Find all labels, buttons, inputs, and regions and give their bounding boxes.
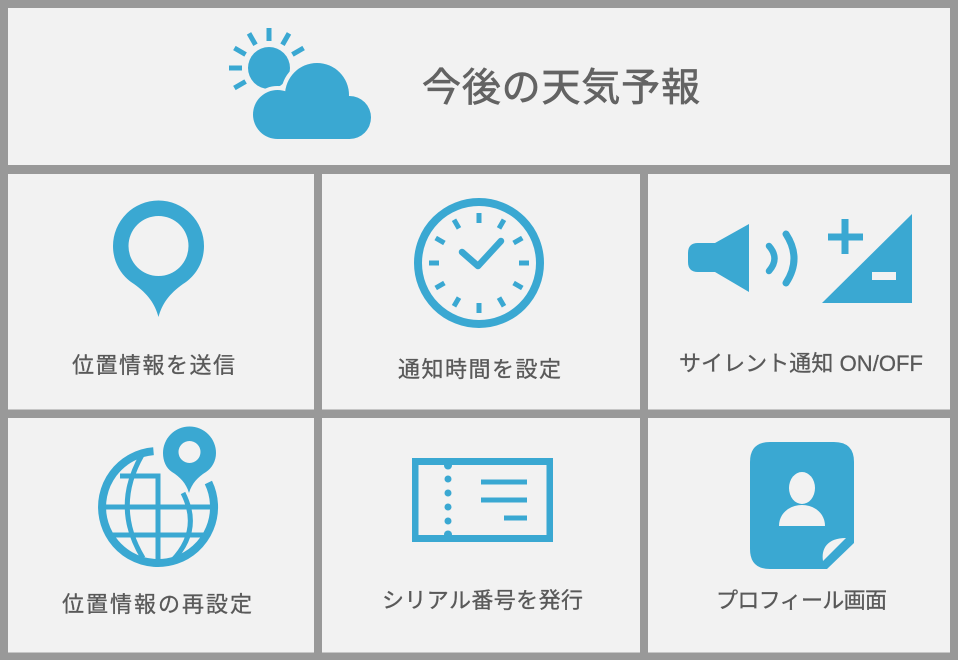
- label: 通知時間を設定: [398, 357, 561, 382]
- icon: sun and cloud: [229, 28, 371, 139]
- icon: volume up and down: [822, 214, 912, 303]
- panel: send location: [8, 174, 314, 410]
- label: サイレント通知 ON/OFF: [679, 351, 923, 376]
- icon: ticket: [412, 458, 553, 542]
- icon: location pin: [113, 200, 204, 317]
- label: プロフィール画面: [716, 588, 887, 613]
- panel: reset location: [8, 418, 314, 652]
- icon: clock: [418, 202, 540, 324]
- label: 位置情報の再設定: [62, 592, 252, 617]
- label: 位置情報を送信: [72, 353, 235, 378]
- panel: notification time: [322, 174, 640, 410]
- panel: weather forecast header: [8, 8, 950, 165]
- title: 今後の天気予報: [422, 67, 700, 110]
- icon: speaker: [688, 224, 794, 292]
- panel: silent notification: [648, 174, 950, 410]
- icon: profile document: [750, 442, 854, 569]
- label: シリアル番号を発行: [382, 588, 583, 613]
- panel: issue serial number: [322, 418, 640, 652]
- panel: profile screen: [648, 418, 950, 652]
- icon: globe with pin: [102, 426, 216, 563]
